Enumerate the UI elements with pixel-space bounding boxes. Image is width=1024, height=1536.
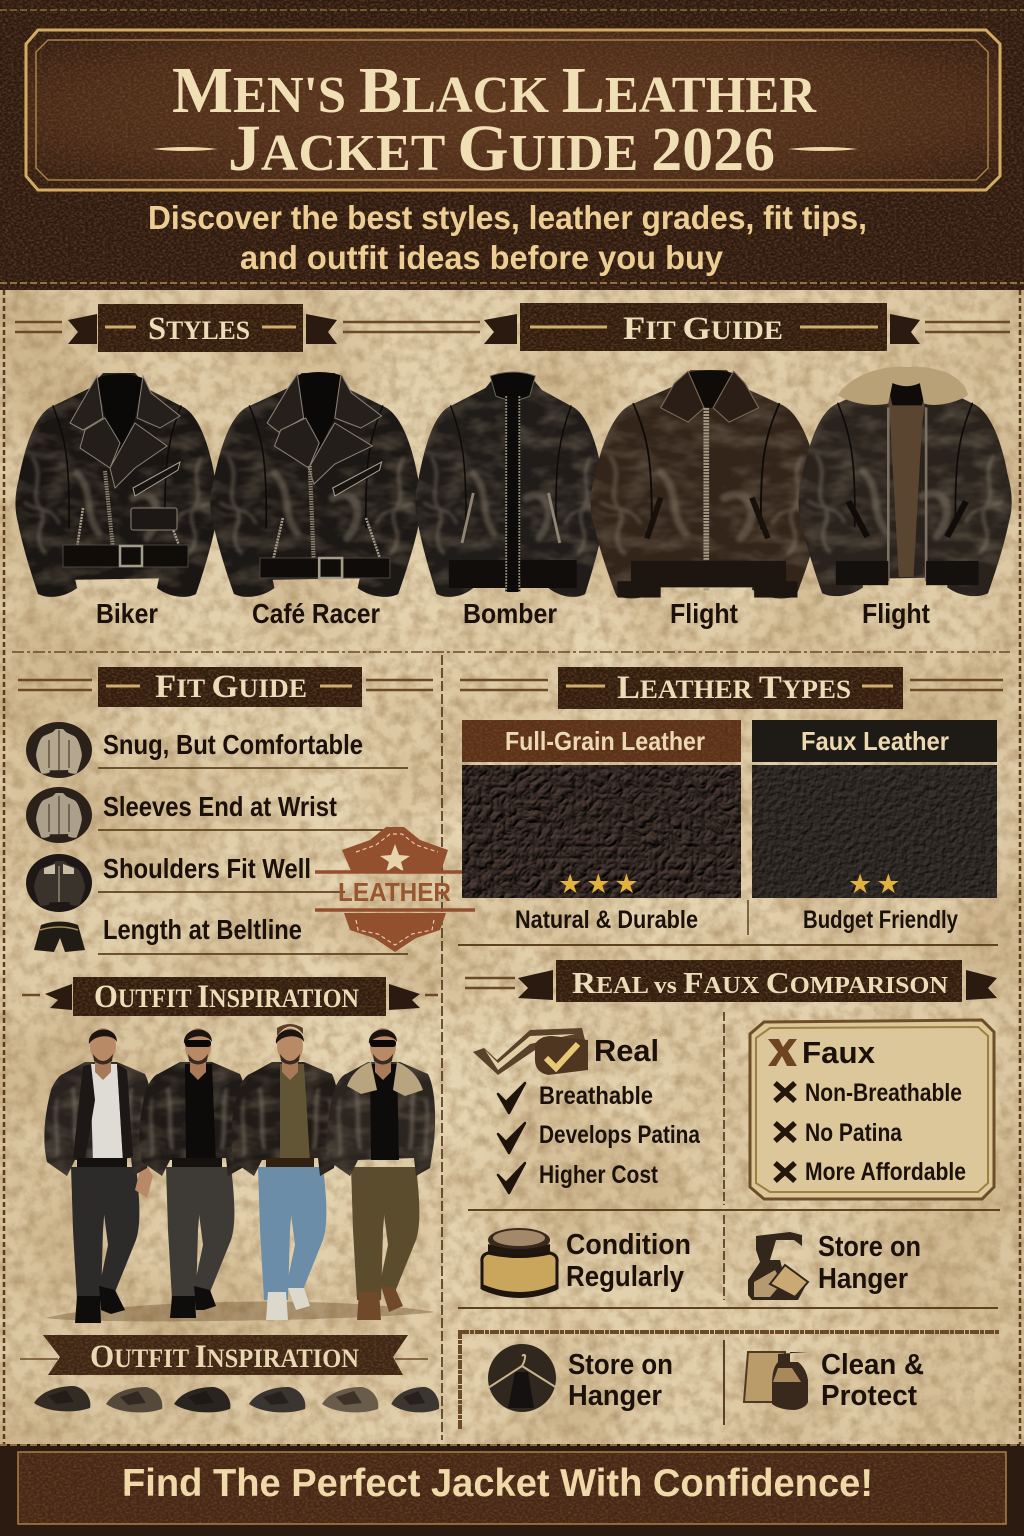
subtitle: Discover the best styles, leather grades, fit tips, [148,199,867,236]
real properties: Develops Patina [539,1121,701,1149]
icon: snug jacket [26,722,92,778]
jacket names: Bomber [463,598,557,629]
care tip: clean and protect: Clean & [821,1349,924,1381]
panel: fit guide [18,667,475,954]
heading: styles: STYLES [148,311,250,347]
care tip: hanger: Hanger [568,1380,662,1412]
leather badge: LEATHER [338,877,451,907]
heading: fit guide top [484,303,1010,351]
leather captions: Natural & Durable [515,906,698,934]
heading: fit guide top: FIT GUIDE [623,311,783,347]
icon: sleeve jacket [26,787,92,843]
heading: styles [15,304,480,352]
care tip: store on hanger: Store on [818,1231,921,1263]
icon: shoulder jacket [26,854,92,912]
swatch: full-grain leather [462,720,741,900]
heading: leather types: LEATHER TYPES [617,670,851,706]
jacket names: Flight [862,598,930,629]
heading: outfit inspiration [22,977,438,1016]
title line 1: MEN'S BLACK LEATHER [172,54,817,127]
ribbon: outfit inspiration: OUTFIT INSPIRATION [90,1339,359,1375]
faux properties [805,1079,966,1186]
care tip: hanger: Store on [568,1349,673,1381]
heading: fit guide: FIT GUIDE [155,669,307,705]
jacket names: Biker [96,598,158,629]
jacket: flight brown [591,370,822,598]
footer banner: Find The Perfect Jacket With Confidence! [122,1462,873,1505]
leather badge [315,827,475,952]
heading: fit guide [18,667,433,707]
leather captions: Budget Friendly [803,906,958,934]
fit tips text: Length at Beltline [103,914,302,945]
figure: man 2 [139,1028,247,1318]
jacket names [96,598,930,629]
heading: real vs faux [465,960,997,1002]
icon: check list [498,1083,525,1193]
care tip: clean and protect: Protect [821,1380,917,1412]
real properties: Breathable [539,1082,653,1110]
real column: Real [594,1033,659,1068]
faux column: Faux [802,1035,876,1070]
footer banner [0,1444,1024,1536]
faux properties: No Patina [805,1119,903,1147]
faux column [750,1020,994,1199]
icon: conditioner jar [482,1228,557,1298]
heading: leather types [460,667,1003,709]
header panel [0,0,1024,290]
care tip: condition regularly: Regularly [566,1261,684,1293]
care tip: condition regularly [482,1228,691,1298]
icons: shoes row [34,1386,439,1412]
figure: man 4 [327,1028,435,1320]
subtitle [148,199,867,276]
jacket names: Flight [670,598,738,629]
jacket: biker [15,373,219,597]
icon: faux x [768,1039,797,1066]
panel: outfit inspiration [20,977,439,1412]
subtitle: and outfit ideas before you buy [240,239,724,276]
frame [750,1020,994,1199]
panel: real vs faux [465,960,997,1300]
figure: man 1 [44,1028,153,1323]
ground shadow [45,1302,435,1321]
care tip: store on hanger: Hanger [818,1263,908,1295]
care tip: condition regularly: Condition [566,1229,691,1261]
swatch: full-grain leather: Full-Grain Leather [505,726,705,756]
care tip: hanger [488,1344,673,1412]
faux properties: More Affordable [805,1158,966,1186]
title line 2: JACKET GUIDE 2026 [228,112,775,185]
real column [473,1028,701,1193]
swatch: faux leather: ★★ [848,869,904,900]
real properties [539,1082,701,1189]
fit tips text: Sleeves End at Wrist [103,791,337,822]
ribbon: outfit inspiration [20,1335,428,1375]
swatch: faux leather [752,720,997,900]
figure: man 3 [231,1024,339,1320]
real properties: Higher Cost [539,1161,659,1189]
icon: spray bottle [748,1232,808,1300]
care tip: clean and protect [744,1349,924,1412]
panel: care box [460,1330,1000,1430]
jacket: cafe racer [210,372,422,597]
title plaque [24,28,1002,192]
jacket: flight shearling [798,367,1012,596]
jacket names: Café Racer [252,598,380,629]
panel: leather types [460,667,1003,935]
icon: real check [473,1028,588,1075]
leather captions [515,900,958,935]
heading: real vs faux: REAL vs FAUX COMPARISON [572,965,949,1000]
heading: outfit inspiration: OUTFIT INSPIRATION [94,979,359,1015]
fit tips text: Shoulders Fit Well [103,853,311,884]
swatch: faux leather: Faux Leather [801,726,949,756]
swatch: full-grain leather: ★★★ [558,869,643,900]
icon: beltline trousers [34,922,85,952]
icon: x list [775,1083,795,1181]
care tip: store on hanger [748,1231,921,1300]
fit tips text: Snug, But Comfortable [103,729,363,760]
jacket: bomber [415,372,606,597]
faux properties: Non-Breathable [805,1079,962,1107]
fit tips text [98,729,408,954]
